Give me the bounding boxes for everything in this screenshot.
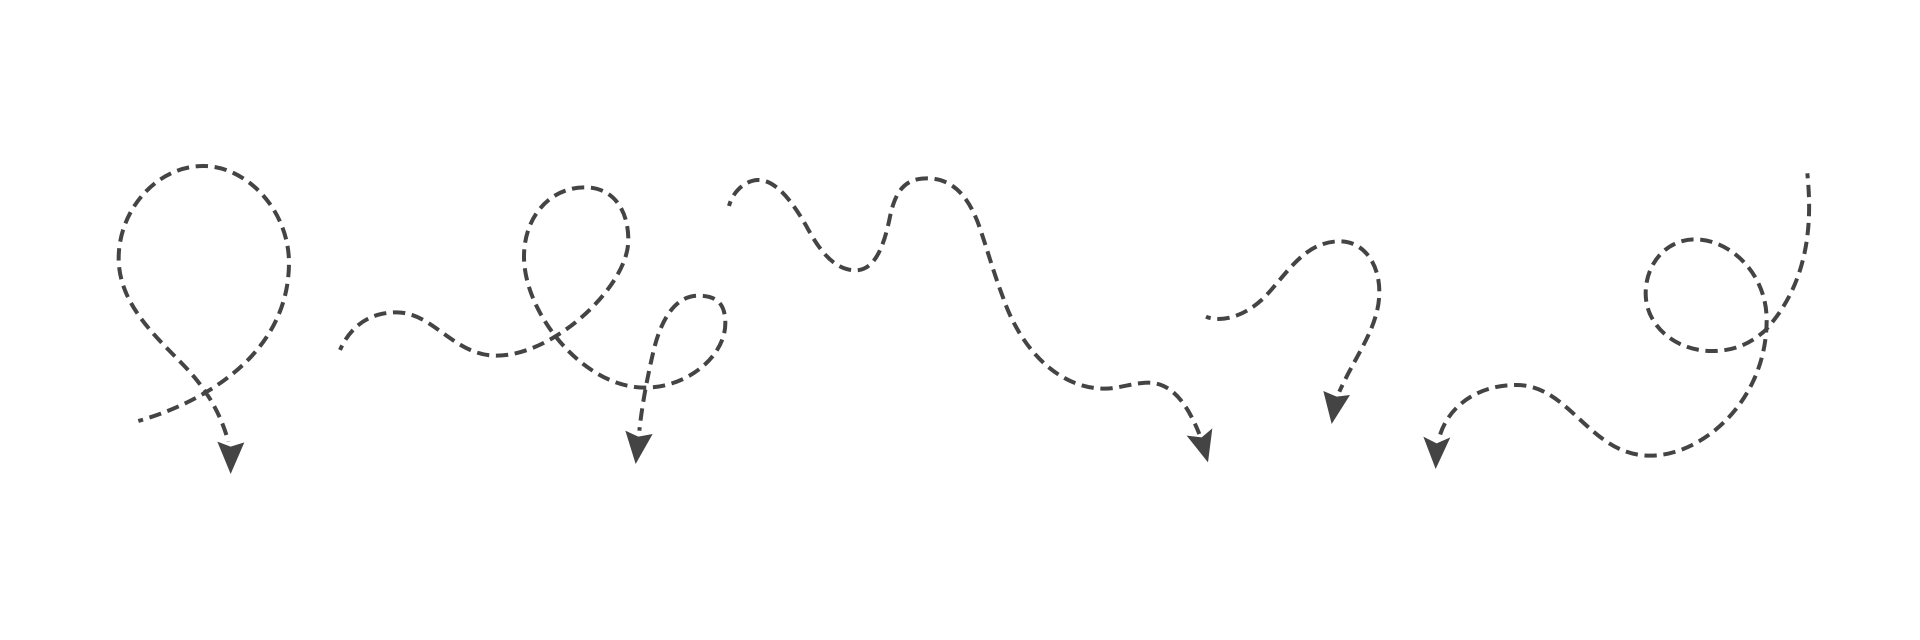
arrow 3: long S-wave pointing down-right	[729, 178, 1212, 462]
arrow 2: wave with two loops pointing down	[340, 187, 725, 464]
arrow 5: descending loop and wave pointing down-left	[1423, 173, 1809, 469]
arrow 1: single loop pointing down	[119, 166, 289, 474]
arrow 4: short arc pointing down-left	[1206, 241, 1379, 424]
